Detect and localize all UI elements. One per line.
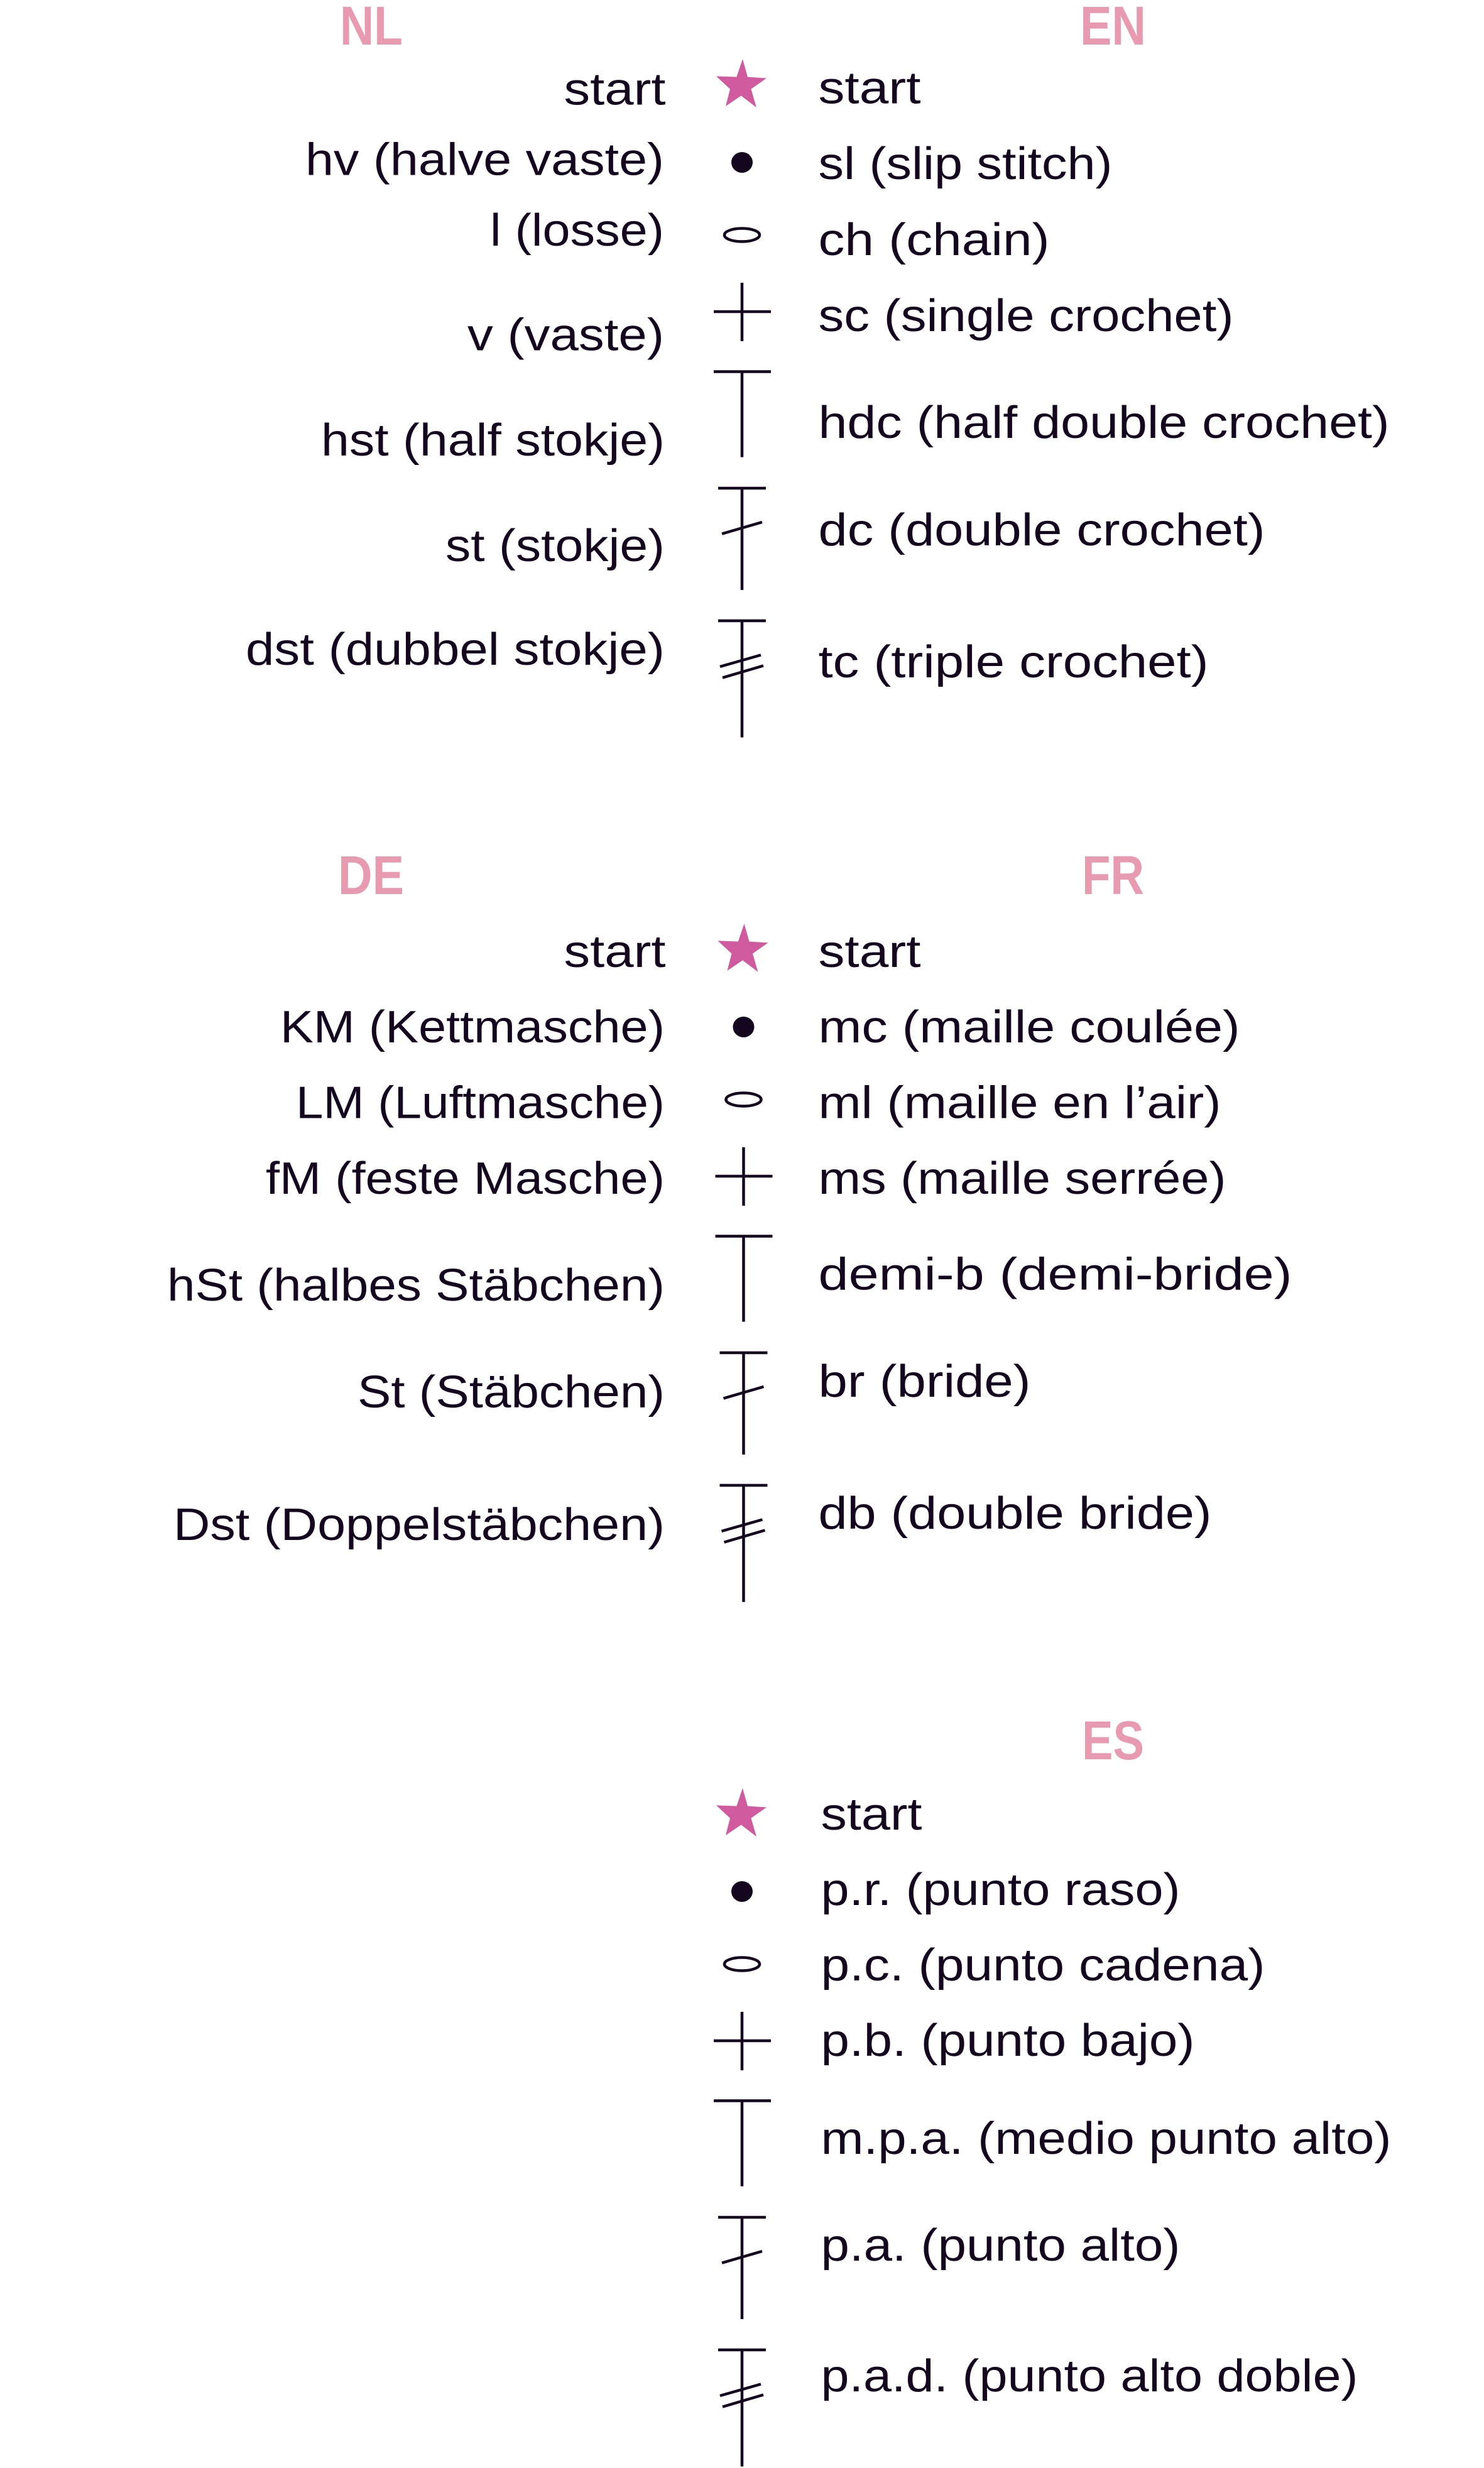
FR labels: demi-b (demi-bride) xyxy=(818,1249,1292,1299)
NL labels: hv (halve vaste) xyxy=(305,135,664,185)
icon: star xyxy=(717,924,768,972)
NL labels: hst (half stokje) xyxy=(321,415,665,466)
heading: FR: FR xyxy=(1082,845,1144,906)
icon: half double crochet xyxy=(715,1237,773,1322)
heading: ES: ES xyxy=(1082,1710,1144,1771)
symbols column xyxy=(714,59,771,738)
EN labels: tc (triple crochet) xyxy=(818,637,1209,687)
NL labels: l (losse) xyxy=(490,205,664,256)
EN labels: sc (single crochet) xyxy=(818,291,1234,341)
FR labels: mc (maille coulée) xyxy=(818,1002,1240,1052)
icon: star xyxy=(716,1788,767,1837)
icon: chain oval xyxy=(724,229,760,241)
icon: triple crochet xyxy=(718,2350,766,2467)
EN labels: sl (slip stitch) xyxy=(818,139,1112,189)
ES labels: start xyxy=(821,1789,922,1840)
panel: ES xyxy=(714,1710,1391,2467)
icon: slip stitch dot xyxy=(731,152,753,173)
panel: DE / FR xyxy=(167,845,1292,1602)
icon: single crochet cross xyxy=(715,1147,773,1206)
icon: chain oval xyxy=(724,1958,760,1970)
icon: slip stitch dot xyxy=(733,1017,754,1037)
symbols column xyxy=(714,1788,771,2467)
EN labels: dc (double crochet) xyxy=(818,505,1265,555)
NL labels xyxy=(246,64,666,675)
ES labels xyxy=(821,1789,1391,2401)
ES labels: m.p.a. (medio punto alto) xyxy=(821,2114,1391,2164)
DE labels xyxy=(167,927,666,1550)
icon: single crochet cross xyxy=(714,283,771,341)
panel: NL / EN xyxy=(246,0,1390,738)
icon: single crochet cross xyxy=(714,2012,771,2070)
DE labels: St (Stäbchen) xyxy=(357,1367,665,1417)
DE labels: LM (Luftmasche) xyxy=(296,1078,665,1128)
DE labels: KM (Kettmasche) xyxy=(280,1002,665,1052)
icon: chain oval xyxy=(726,1093,761,1106)
symbols column xyxy=(715,924,773,1602)
FR labels: br (bride) xyxy=(818,1357,1030,1407)
icon: double crochet xyxy=(718,2217,766,2319)
ES labels: p.b. (punto bajo) xyxy=(821,2016,1195,2066)
DE labels: hSt (halbes Stäbchen) xyxy=(167,1260,665,1311)
icon: double crochet xyxy=(718,488,766,590)
NL labels: v (vaste) xyxy=(467,310,664,361)
icon: half double crochet xyxy=(714,372,771,457)
EN labels xyxy=(818,63,1390,687)
DE labels: fM (feste Masche) xyxy=(266,1154,665,1204)
icon: half double crochet xyxy=(714,2101,771,2187)
EN labels: ch (chain) xyxy=(818,215,1049,265)
icon: star xyxy=(716,59,767,107)
ES labels: p.c. (punto cadena) xyxy=(821,1940,1265,1990)
EN labels: start xyxy=(818,63,921,114)
FR labels: start xyxy=(818,927,921,977)
ES labels: p.a. (punto alto) xyxy=(821,2220,1180,2271)
EN labels: hdc (half double crochet) xyxy=(818,398,1390,448)
FR labels: ml (maille en l’air) xyxy=(818,1078,1221,1128)
NL labels: dst (dubbel stokje) xyxy=(246,625,665,675)
DE labels: start xyxy=(564,927,666,977)
icon: slip stitch dot xyxy=(731,1881,753,1902)
ES labels: p.a.d. (punto alto doble) xyxy=(821,2351,1358,2401)
NL labels: start xyxy=(564,64,666,114)
heading: DE: DE xyxy=(338,845,404,906)
ES labels: p.r. (punto raso) xyxy=(821,1865,1180,1915)
icon: triple crochet xyxy=(720,1485,768,1602)
icon: triple crochet xyxy=(718,621,766,738)
NL labels: st (stokje) xyxy=(445,521,665,571)
FR labels: db (double bride) xyxy=(818,1488,1211,1539)
FR labels: ms (maille serrée) xyxy=(818,1154,1226,1204)
icon: double crochet xyxy=(720,1353,768,1455)
FR labels xyxy=(818,927,1292,1539)
DE labels: Dst (Doppelstäbchen) xyxy=(173,1500,665,1550)
